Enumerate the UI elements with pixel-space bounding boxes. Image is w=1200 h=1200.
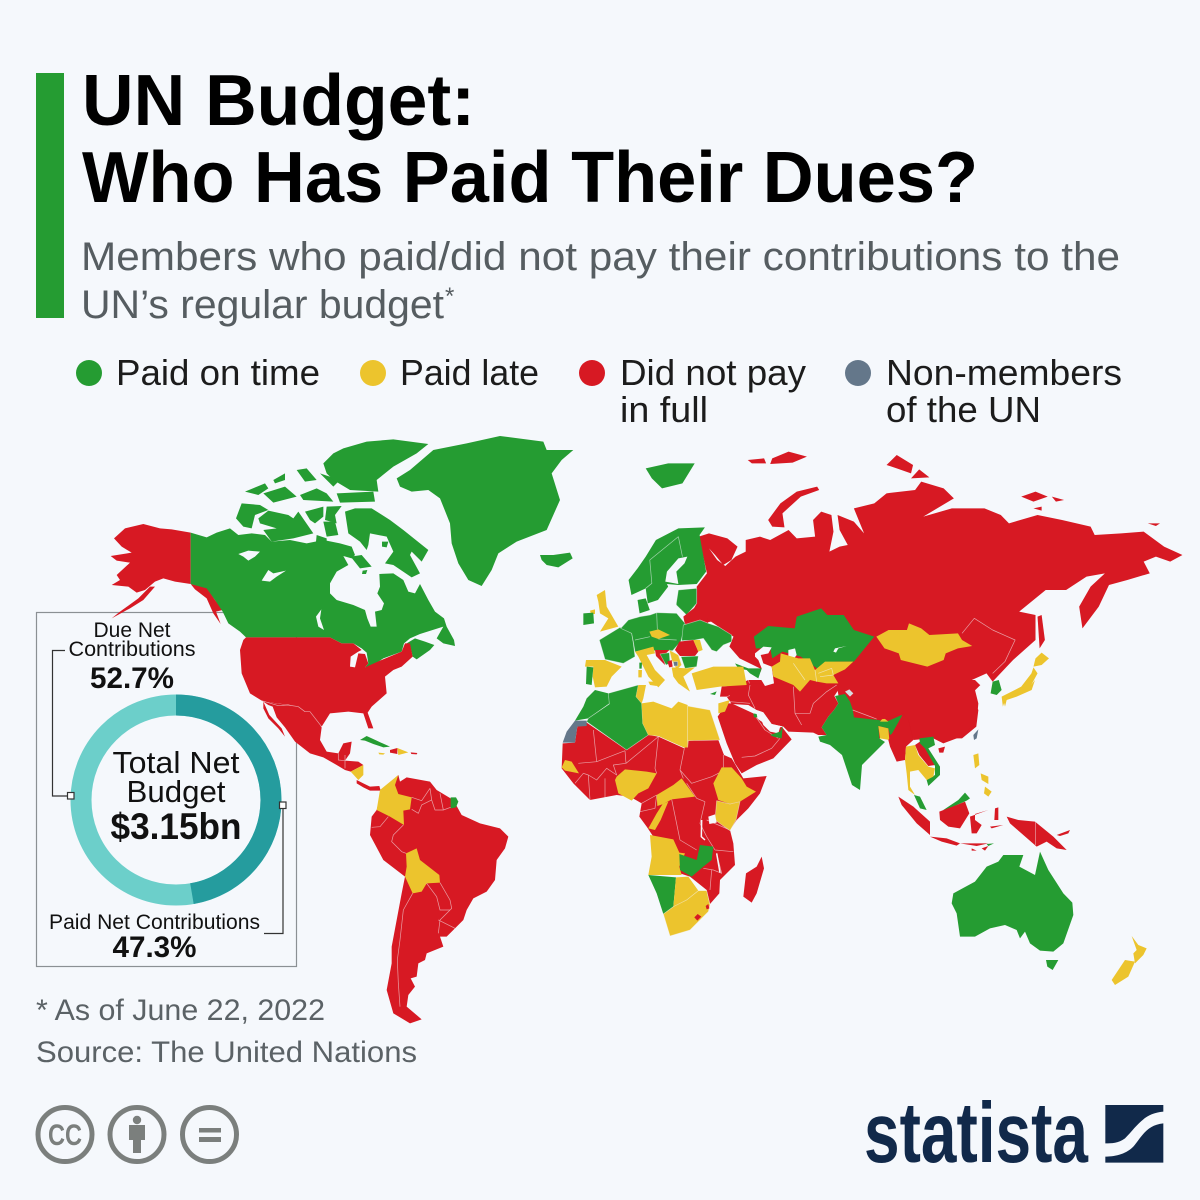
Asia-Pacific	[860, 680, 1147, 985]
Caribbean islands	[360, 736, 390, 747]
Java and Lesser Sunda	[930, 837, 960, 846]
Morocco	[575, 690, 609, 721]
Svalbard	[646, 463, 695, 488]
Namibia	[648, 875, 676, 914]
donut centre label: $3.15bn	[110, 806, 242, 847]
subtitle: Members who paid/did not pay their contributions to the	[81, 235, 1120, 279]
legend: non-members	[845, 352, 1122, 430]
China south	[860, 680, 980, 743]
Baja California	[263, 702, 285, 737]
subtitle	[81, 235, 1120, 327]
legend: did not pay in full	[579, 352, 806, 430]
Caspian Sea	[755, 647, 774, 686]
Western Sahara	[563, 721, 587, 743]
Central African Republic	[657, 778, 695, 806]
Taiwan	[973, 729, 978, 740]
Kazakhstan, Kyrgyzstan	[754, 608, 874, 670]
South Korea	[991, 680, 1002, 695]
Central Asia	[772, 653, 853, 692]
Thailand and Cambodia	[905, 745, 935, 795]
Aleutian peninsula	[112, 587, 155, 618]
Sub-Saharan base	[562, 723, 767, 904]
Egypt	[688, 706, 720, 747]
Russia and China landmass	[684, 482, 1182, 738]
Arctic islands	[236, 439, 428, 577]
Tunisia	[636, 685, 646, 703]
Lake Victoria	[708, 814, 717, 824]
Central and South Asia	[730, 646, 903, 790]
title	[82, 61, 978, 218]
connector: due	[52, 650, 74, 799]
Angola	[648, 835, 685, 875]
label: due net contributions: 52.7%	[90, 662, 174, 695]
Bangladesh	[878, 726, 889, 740]
Iceland	[540, 553, 573, 567]
Nicaragua	[351, 765, 363, 780]
donut centre label: Budget	[126, 774, 226, 809]
footnote and source	[36, 994, 417, 1069]
Myanmar	[888, 713, 913, 762]
Senegal	[562, 760, 579, 773]
Bhutan	[880, 718, 888, 722]
South America base	[370, 775, 508, 1023]
Algeria	[587, 685, 648, 750]
Portugal	[586, 667, 593, 685]
Russia-China border	[962, 618, 1015, 673]
label: due net contributions: Contributions	[68, 638, 196, 661]
Jordan	[718, 700, 730, 713]
label: due net contributions: Due Net	[94, 619, 171, 642]
Czech Republic	[649, 629, 670, 639]
African borders	[575, 730, 733, 890]
donut centre label	[110, 745, 242, 847]
icon: attribution	[110, 1108, 164, 1162]
Georgia, Armenia, Azerbaijan	[735, 663, 762, 678]
subtitle: UN’s regular budget	[81, 283, 444, 327]
Libya	[642, 702, 688, 748]
Nova Scotia and New Brunswick	[407, 638, 434, 659]
legend: non-members: of the UN	[886, 389, 1041, 430]
Central Europe	[621, 613, 685, 652]
icon: CC	[38, 1108, 92, 1162]
Ukraine	[682, 620, 732, 652]
Philippines	[973, 753, 979, 768]
Ireland	[583, 613, 594, 625]
North America	[111, 436, 573, 728]
logo mark	[1105, 1105, 1163, 1163]
UAE and Qatar	[770, 726, 783, 738]
Greece and Albania	[672, 667, 695, 692]
footnote and source: Source: The United Nations	[36, 1036, 417, 1069]
US-Mexico border	[262, 701, 345, 768]
Hainan	[938, 747, 945, 753]
Tasmania	[1046, 960, 1058, 970]
Hokkaido and Honshu	[1033, 653, 1049, 667]
Spain	[585, 660, 622, 687]
Moldova	[693, 640, 703, 652]
Statista logo	[864, 1086, 1163, 1181]
South American borders	[372, 788, 455, 1007]
India	[818, 694, 903, 790]
Bolivia	[405, 848, 440, 893]
Canadian lakes	[238, 551, 260, 561]
subtitle: *	[445, 283, 454, 310]
world map	[111, 436, 1182, 1023]
Russian Arctic islands	[748, 452, 1160, 648]
Costa Rica and Panama	[357, 780, 381, 791]
icon: CC: CC	[48, 1119, 82, 1152]
legend: did not pay in full: in full	[620, 389, 708, 430]
Mexico	[262, 701, 363, 772]
Middle East	[718, 680, 835, 773]
Mexico mainland	[263, 702, 363, 772]
donut centre label: Total Net	[112, 745, 240, 780]
Central and South America	[351, 736, 508, 1023]
Lake Tanganyika and Lake Malawi	[701, 820, 705, 840]
Lake Balkhash	[833, 646, 847, 653]
Alaska panhandle	[191, 584, 223, 624]
Japan south	[1003, 680, 1035, 707]
New Guinea	[1007, 817, 1067, 850]
Iran, Afghanistan, Pakistan	[730, 680, 838, 735]
Sulawesi and Maluku	[970, 810, 988, 833]
Africa	[562, 685, 767, 936]
accent bar	[36, 73, 64, 318]
Arabian Peninsula	[718, 703, 792, 773]
Creative Commons icons	[38, 1108, 236, 1162]
Ethiopia	[713, 767, 756, 804]
label: paid net contributions: Paid Net Contributions	[49, 911, 260, 934]
Botswana	[673, 877, 698, 907]
Malaysia	[914, 795, 927, 810]
French Guiana	[451, 797, 458, 808]
Madagascar	[743, 857, 764, 903]
legend	[76, 352, 1122, 430]
Balkans	[655, 650, 669, 665]
Mongolia	[876, 623, 972, 667]
United States	[240, 637, 413, 728]
Cyprus	[710, 691, 717, 695]
Alaska	[111, 524, 191, 593]
Borneo	[939, 802, 969, 828]
connector: paid	[264, 802, 286, 934]
logo wordmark: statista	[864, 1086, 1089, 1181]
Bulgaria	[681, 656, 698, 668]
France	[599, 627, 635, 663]
legend: paid late: Paid late	[400, 352, 539, 393]
Scandinavia and Russia	[629, 452, 1182, 738]
Australia	[952, 852, 1073, 952]
donut chart	[81, 705, 271, 895]
Greenland	[397, 436, 573, 586]
Laos	[915, 742, 935, 766]
South Africa	[663, 891, 710, 936]
label: paid net contributions	[49, 911, 260, 964]
legend: did not pay in full: Did not pay	[620, 352, 806, 393]
Denmark	[638, 598, 650, 613]
Romania	[675, 640, 698, 656]
title: Who Has Paid Their Dues?	[82, 138, 978, 218]
legend: non-members: Non-members	[886, 352, 1122, 393]
inset panel frame	[36, 612, 296, 966]
Lesotho and Eswatini	[694, 914, 701, 921]
Kashmir	[845, 689, 853, 697]
Republic of Congo	[648, 802, 668, 830]
Belarus	[683, 606, 708, 625]
Baltic states	[676, 588, 697, 615]
Norway, Sweden and Finland	[629, 527, 706, 603]
Persian Gulf	[758, 711, 783, 733]
label: paid net contributions: 47.3%	[112, 931, 196, 964]
New Zealand	[1132, 936, 1147, 963]
inset: donut panel	[49, 619, 286, 964]
icon: no derivatives	[182, 1108, 236, 1162]
Nigeria and Benin	[615, 769, 657, 801]
Syria and Iraq	[720, 680, 835, 735]
Colombia	[377, 775, 412, 825]
label: due net contributions	[68, 619, 196, 695]
Turkey	[692, 667, 747, 690]
UK	[597, 590, 618, 632]
title: UN Budget:	[82, 61, 475, 141]
Canada mainland	[191, 528, 455, 667]
Sumatra	[898, 797, 930, 835]
footnote and source: * As of June 22, 2022	[36, 994, 325, 1027]
Kenya	[715, 801, 740, 831]
Zambia	[679, 845, 713, 877]
legend: paid on time: Paid on time	[116, 352, 320, 393]
Aral Sea	[788, 648, 797, 659]
Europe	[583, 590, 747, 695]
Vietnam	[919, 737, 940, 786]
Italy	[635, 647, 665, 687]
